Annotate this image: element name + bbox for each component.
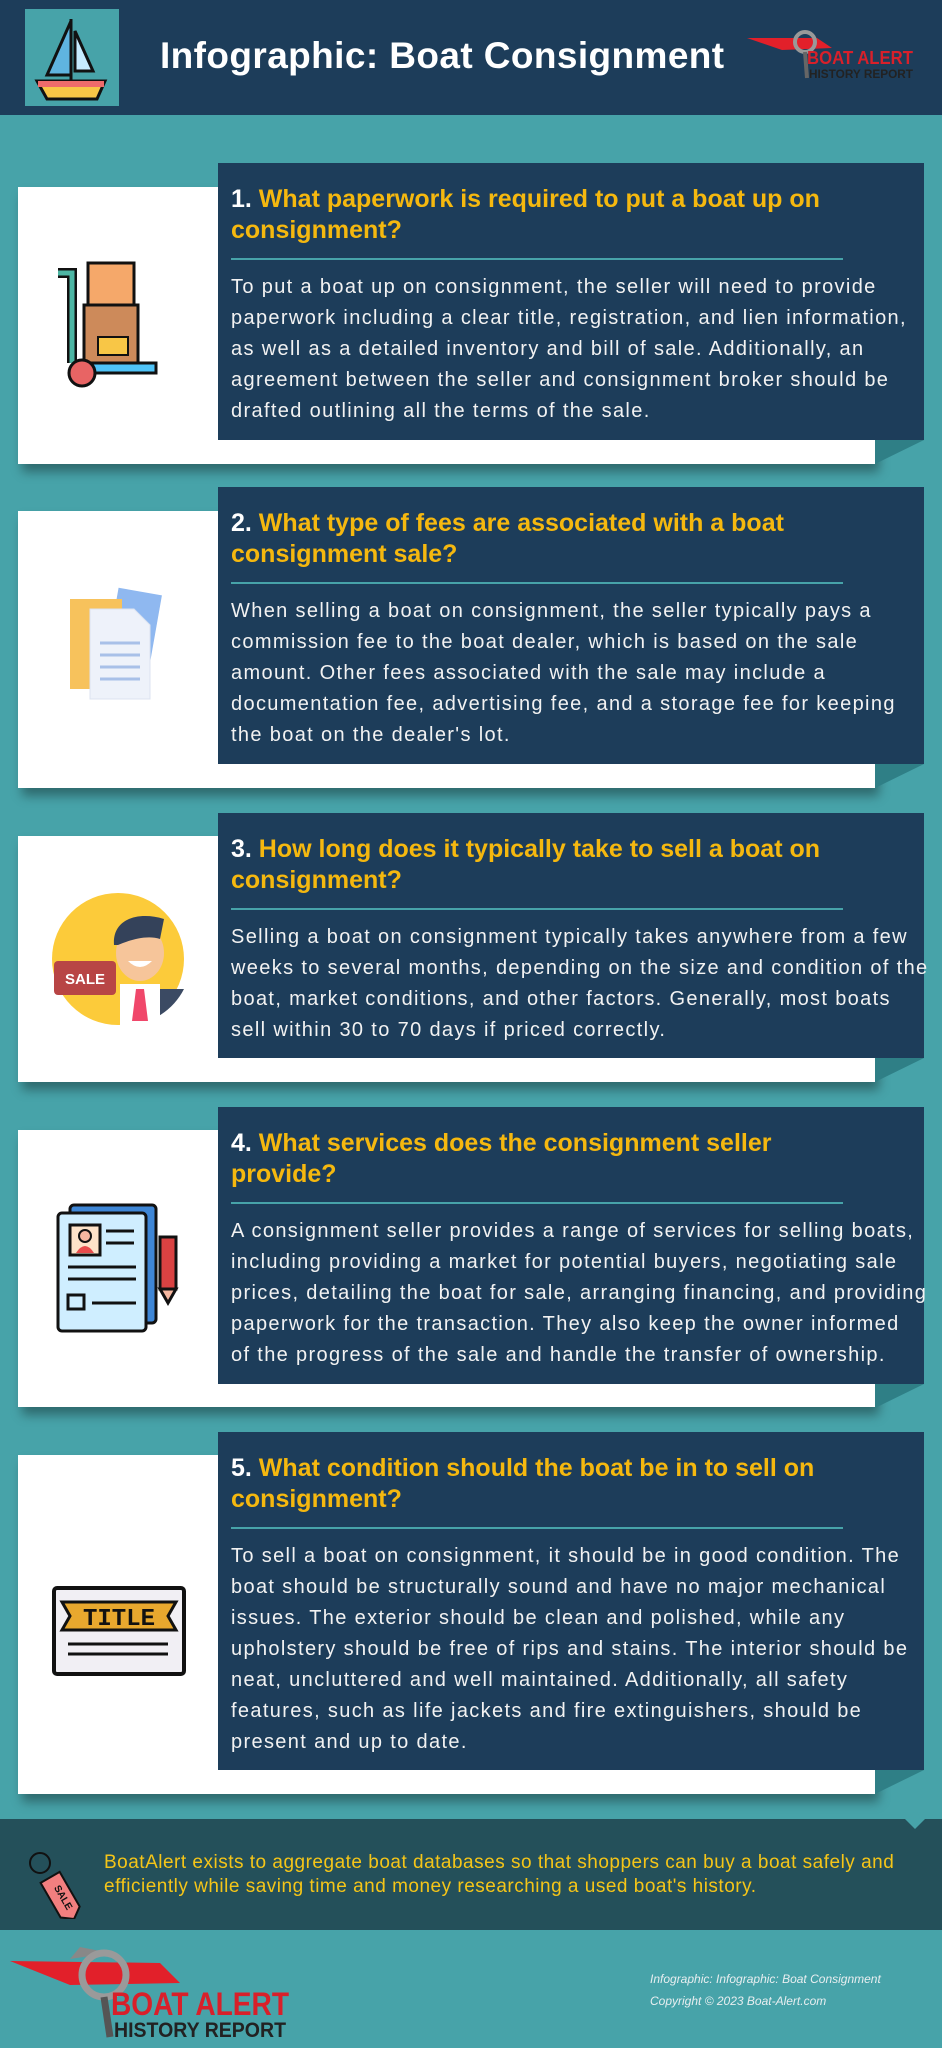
text box 3: Selling a boat on consignment typically takes anywhere from a few bbox=[231, 926, 908, 948]
text box 3: weeks to several months, depending on the size and condition of the bbox=[231, 957, 929, 979]
text box 4: provide? bbox=[231, 1160, 337, 1188]
text box 2: consignment sale? bbox=[231, 540, 457, 568]
footer credits: Infographic: Infographic: Boat Consignment bbox=[650, 1972, 881, 1986]
text box 1: agreement between the seller and consignment broker should be bbox=[231, 369, 889, 391]
text box 2: the boat on the dealer's lot. bbox=[231, 724, 511, 746]
text box 4: of the progress of the sale and handle the transfer of ownership. bbox=[231, 1344, 886, 1366]
title: Infographic: Boat Consignment bbox=[160, 35, 725, 76]
text box 5: issues. The exterior should be clean and polished, while any bbox=[231, 1607, 845, 1629]
panel 1 bbox=[16, 163, 924, 478]
icon: title document bbox=[52, 1586, 186, 1676]
text box 2: amount. Other fees associated with the sale may include a bbox=[231, 662, 826, 684]
about text: efficiently while saving time and money researching a used boat's history. bbox=[104, 1876, 756, 1897]
text box 5: boat should be structurally sound and have no major mechanical bbox=[231, 1576, 886, 1598]
text box 2 bbox=[218, 487, 924, 764]
about text: BoatAlert exists to aggregate boat databases so that shoppers can buy a boat safely and bbox=[104, 1852, 894, 1873]
text box 4: prices, detailing the boat for sale, arranging financing, and providing bbox=[231, 1282, 927, 1304]
header bar bbox=[0, 0, 942, 115]
icon: documents bbox=[70, 588, 162, 700]
text box 4: A consignment seller provides a range of services for selling boats, bbox=[231, 1220, 914, 1242]
text box 1: as well as a detailed inventory and bill of sale. Additionally, an bbox=[231, 338, 865, 360]
text box 4 bbox=[218, 1107, 924, 1384]
text box 5: features, such as life jackets and fire extinguishers, should be bbox=[231, 1700, 862, 1722]
icon: resume with pencil bbox=[56, 1204, 178, 1332]
text box 4: 4. What services does the consignment seller bbox=[231, 1129, 771, 1157]
text box 1 bbox=[218, 163, 924, 440]
text box 4: including providing a market for potential buyers, negotiating sale bbox=[231, 1251, 897, 1273]
icon: salesman bbox=[52, 893, 184, 1025]
text box 5: consignment? bbox=[231, 1485, 402, 1513]
text box 5: 5. What condition should the boat be in to sell on bbox=[231, 1454, 814, 1482]
icon: salesman: SALE bbox=[65, 971, 105, 988]
text box 5: upholstery should be free of rips and stains. The interior should be bbox=[231, 1638, 908, 1660]
logo: boat alert bbox=[747, 30, 914, 81]
text box 2: documentation fee, advertising fee, and a storage fee for keeping bbox=[231, 693, 896, 715]
text box 2: commission fee to the boat dealer, which is based on the sale bbox=[231, 631, 858, 653]
pointer bbox=[905, 1819, 925, 1829]
text box 3: 3. How long does it typically take to sell a boat on bbox=[231, 835, 820, 863]
panel 3 bbox=[16, 813, 929, 1096]
text box 5: To sell a boat on consignment, it should be in good condition. The bbox=[231, 1545, 900, 1567]
about text bbox=[104, 1852, 894, 1897]
text box 1: To put a boat up on consignment, the seller will need to provide bbox=[231, 276, 877, 298]
text box 2: 2. What type of fees are associated with a boat bbox=[231, 509, 784, 537]
text box 3 bbox=[218, 813, 924, 1058]
logo: boat alert: HISTORY REPORT bbox=[809, 67, 914, 81]
footer credits: Copyright © 2023 Boat-Alert.com bbox=[650, 1994, 826, 2008]
text box 3: boat, market conditions, and other factors. Generally, most boats bbox=[231, 988, 891, 1010]
text box 1: paperwork including a clear title, registration, and lien information, bbox=[231, 307, 907, 329]
text box 1: 1. What paperwork is required to put a boat up on bbox=[231, 185, 820, 213]
panel 2 bbox=[16, 487, 924, 802]
text box 5: neat, uncluttered and well maintained. Additionally, all safety bbox=[231, 1669, 848, 1691]
text box 1: consignment? bbox=[231, 216, 402, 244]
icon: sale tag bbox=[29, 1852, 81, 1919]
icon: sale tag: SALE bbox=[51, 1884, 74, 1912]
text box 5 bbox=[218, 1432, 924, 1770]
text box 1: drafted outlining all the terms of the sale. bbox=[231, 400, 651, 422]
text box 5: present and up to date. bbox=[231, 1731, 468, 1753]
text box 2: When selling a boat on consignment, the seller typically pays a bbox=[231, 600, 872, 622]
text box 3: sell within 30 to 70 days if priced correctly. bbox=[231, 1019, 666, 1041]
text box 4: paperwork for the transaction. They also keep the owner informed bbox=[231, 1313, 900, 1335]
panel 5 bbox=[16, 1432, 924, 1808]
icon: hand truck with boxes bbox=[58, 262, 158, 388]
icon: sailboat bbox=[25, 9, 119, 106]
footer logo bbox=[10, 1947, 289, 2040]
text box 3: consignment? bbox=[231, 866, 402, 894]
panel 4 bbox=[16, 1107, 927, 1420]
bottom band: about bbox=[0, 1819, 942, 1930]
icon: title document: TITLE bbox=[83, 1606, 155, 1633]
footer credits bbox=[650, 1972, 882, 2008]
